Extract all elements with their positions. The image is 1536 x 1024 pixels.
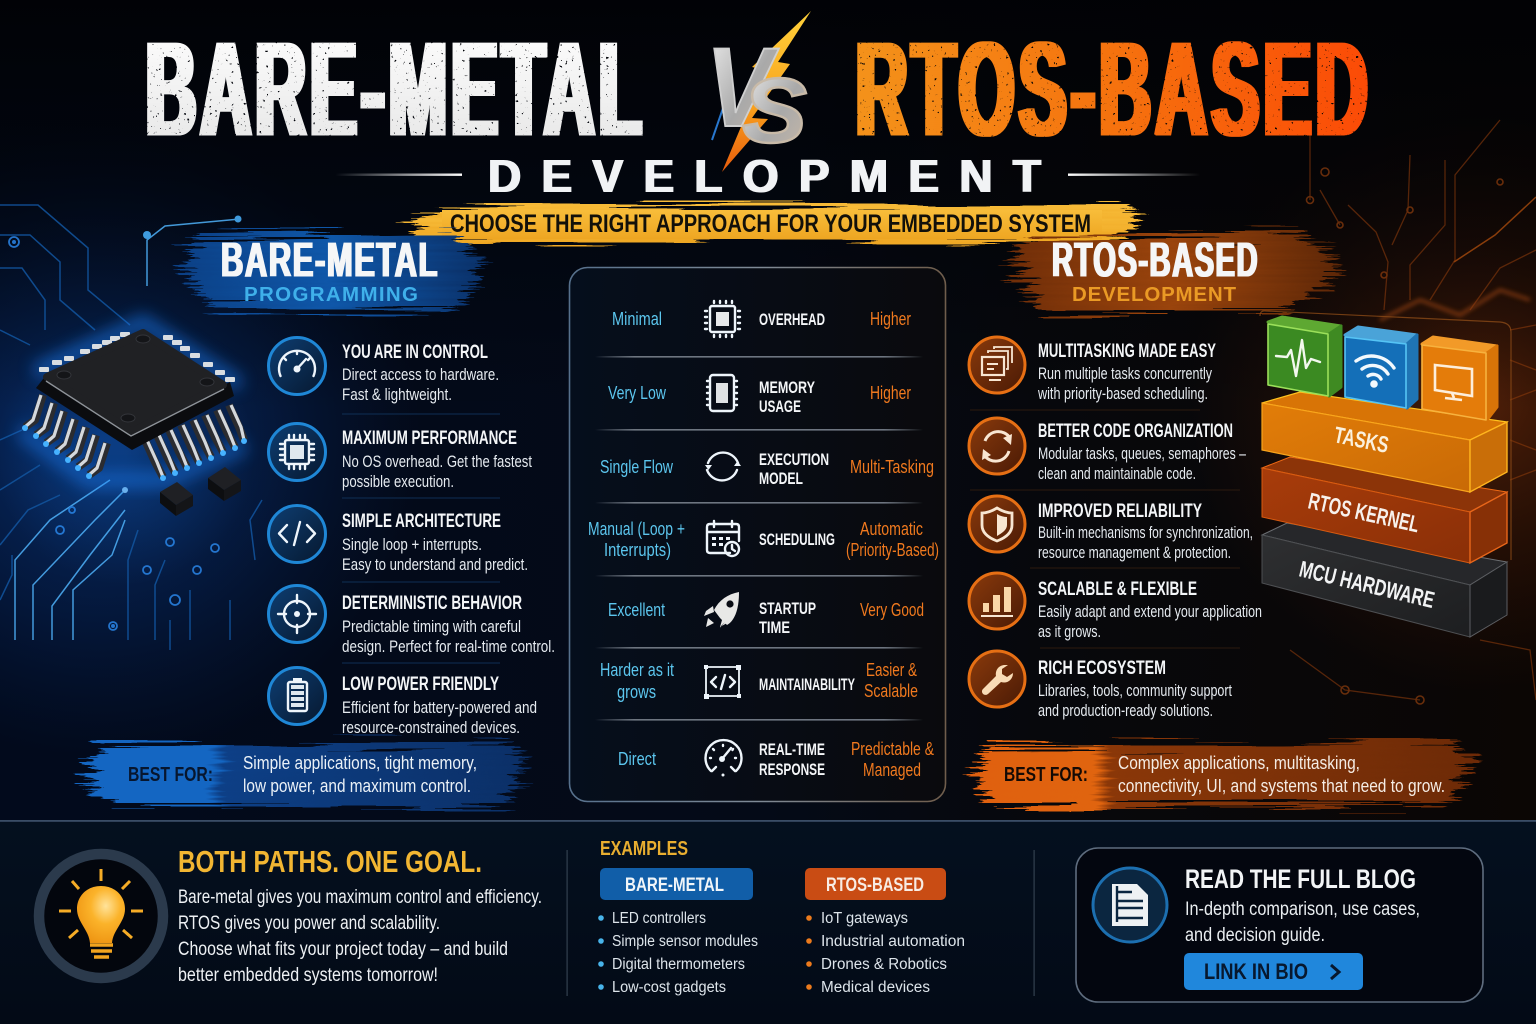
feature: scalable: SCALABLE & FLEXIBLE xyxy=(1038,579,1197,600)
icon: document xyxy=(1093,868,1167,942)
text block: both paths: BOTH PATHS. ONE GOAL. xyxy=(178,844,482,879)
heading: rtos-based development: DEVELOPMENT xyxy=(1072,283,1236,306)
call to action card xyxy=(1076,848,1483,1002)
feature: reliability: Built-in mechanisms for synchronization, xyxy=(1038,524,1253,542)
feature: you are in control xyxy=(268,338,499,404)
callout: rtos best for: Complex applications, multitasking, xyxy=(1118,753,1360,773)
layer: tasks xyxy=(1262,392,1507,492)
row: startup time: TIME xyxy=(759,619,790,637)
rtos examples: Industrial automation xyxy=(821,933,965,950)
callout: bare-metal best for xyxy=(72,742,535,806)
feature: multitasking: MULTITASKING MADE EASY xyxy=(1038,341,1216,362)
panel: rtos features xyxy=(969,337,1262,720)
text block: both paths xyxy=(178,844,542,986)
row: maintainability xyxy=(600,660,918,702)
diagram: rtos stack xyxy=(1260,311,1511,637)
row: scheduling: (Priority-Based) xyxy=(846,540,939,560)
row: scheduling: Manual (Loop + xyxy=(588,519,685,539)
panel: comparison table xyxy=(570,268,946,802)
row: memory usage: Higher xyxy=(870,383,911,403)
heading: bare-metal programming xyxy=(172,232,490,311)
feature: reliability: resource management & protection. xyxy=(1038,544,1231,562)
row: memory usage: MEMORY xyxy=(759,379,815,397)
feature: code organization: BETTER CODE ORGANIZATION xyxy=(1038,421,1233,442)
row: memory usage: Very Low xyxy=(608,383,667,403)
row: maintainability: grows xyxy=(617,682,656,702)
tile: activity xyxy=(1268,317,1341,396)
row: real-time response: Predictable & xyxy=(851,739,934,759)
layer: mcu hardware xyxy=(1262,523,1507,637)
feature: you are in control: Direct access to hardware. xyxy=(342,366,499,384)
feature: maximum performance: possible execution. xyxy=(342,473,454,491)
rtos examples: IoT gateways xyxy=(821,910,908,927)
row: execution model: Single Flow xyxy=(600,457,674,477)
layer: tasks: TASKS xyxy=(1332,421,1391,458)
feature: deterministic behavior: Predictable timing with careful xyxy=(342,618,521,636)
heading: bare-metal programming: PROGRAMMING xyxy=(244,283,418,306)
small components xyxy=(160,482,193,516)
callout: bare-metal best for: low power, and maximum control. xyxy=(243,776,471,796)
button: link in bio xyxy=(1184,953,1363,990)
feature: deterministic behavior: design. Perfect for real-time control. xyxy=(342,638,555,656)
row: memory usage: USAGE xyxy=(759,398,801,416)
row: scheduling: Interrupts) xyxy=(604,540,671,560)
layer: mcu hardware: MCU HARDWARE xyxy=(1297,556,1437,613)
rtos examples: Drones & Robotics xyxy=(821,956,947,973)
feature: multitasking xyxy=(969,337,1216,403)
callout: rtos best for xyxy=(968,742,1480,806)
feature: simple architecture: Easy to understand and predict. xyxy=(342,556,528,574)
footer panel xyxy=(0,820,1536,1024)
row: maintainability: Scalable xyxy=(864,681,918,701)
feature: low power friendly: LOW POWER FRIENDLY xyxy=(342,674,499,695)
feature: reliability xyxy=(969,496,1253,562)
bare-metal examples: Digital thermometers xyxy=(612,956,745,973)
row: maintainability: Harder as it xyxy=(600,660,674,680)
heading: bare-metal programming: BARE-METAL xyxy=(221,234,439,288)
feature: scalable: as it grows. xyxy=(1038,623,1101,641)
banner: tagline xyxy=(405,205,1146,242)
feature: simple architecture xyxy=(268,506,528,574)
text block: both paths: RTOS gives you power and scalability. xyxy=(178,913,440,934)
feature: multitasking: with priority-based scheduling. xyxy=(1037,385,1208,403)
call to action card: READ THE FULL BLOG xyxy=(1185,864,1416,894)
row: scheduling: SCHEDULING xyxy=(759,531,835,549)
row: real-time response xyxy=(618,739,934,780)
feature: low power friendly xyxy=(268,668,537,737)
row: startup time: Very Good xyxy=(860,600,924,620)
row: maintainability: MAINTAINABILITY xyxy=(759,676,855,694)
row: scheduling: Automatic xyxy=(860,519,923,539)
tile: wifi xyxy=(1345,327,1417,408)
call to action card: and decision guide. xyxy=(1185,925,1325,946)
row: execution model: MODEL xyxy=(759,470,803,488)
circuit traces: left xyxy=(0,205,262,650)
row: overhead: OVERHEAD xyxy=(759,311,825,329)
examples xyxy=(598,838,965,996)
callout: rtos best for: connectivity, UI, and systems that need to grow. xyxy=(1118,776,1445,796)
heading: rtos-based development: RTOS-BASED xyxy=(1052,234,1259,288)
row: real-time response: Managed xyxy=(863,760,921,780)
row: overhead xyxy=(612,301,911,337)
feature: maximum performance: MAXIMUM PERFORMANCE xyxy=(342,428,517,449)
feature: you are in control: Fast & lightweight. xyxy=(342,386,452,404)
bare-metal examples: Simple sensor modules xyxy=(612,933,758,950)
icon: light bulb xyxy=(39,854,163,978)
row: scheduling xyxy=(588,519,939,560)
feature: deterministic behavior: DETERMINISTIC BEHAVIOR xyxy=(342,593,522,614)
icon: lightning bolt xyxy=(712,11,811,172)
heading: rtos-based development xyxy=(1000,232,1346,311)
VS lettering: V xyxy=(706,25,779,150)
layer: rtos kernel: RTOS KERNEL xyxy=(1306,487,1422,537)
button: link in bio: LINK IN BIO xyxy=(1204,959,1308,984)
feature: low power friendly: Efficient for battery-powered and xyxy=(342,699,537,717)
circuit traces: right xyxy=(1290,120,1536,704)
feature: ecosystem: and production-ready solutions. xyxy=(1038,702,1213,720)
row: execution model xyxy=(600,451,934,488)
callout: rtos best for: BEST FOR: xyxy=(1004,764,1088,786)
call to action card: In-depth comparison, use cases, xyxy=(1185,899,1420,920)
subtitle: DEVELOPMENT: DEVELOPMENT xyxy=(488,150,1041,202)
text block: both paths: Choose what fits your project today – and build xyxy=(178,939,508,960)
feature: code organization: Modular tasks, queues, semaphores – xyxy=(1038,445,1247,463)
VS lettering xyxy=(706,25,807,162)
row: startup time: Excellent xyxy=(608,600,665,620)
chip top pads xyxy=(39,332,235,382)
row: execution model: Multi-Tasking xyxy=(850,457,934,477)
feature: code organization xyxy=(969,418,1247,483)
examples: EXAMPLES xyxy=(600,838,688,860)
feature: maximum performance xyxy=(268,424,532,491)
bare-metal examples: Low-cost gadgets xyxy=(612,979,726,996)
feature: low power friendly: resource-constrained devices. xyxy=(342,719,520,737)
row: memory usage xyxy=(608,375,911,416)
feature: multitasking: Run multiple tasks concurrently xyxy=(1038,365,1213,383)
banner: tagline: CHOOSE THE RIGHT APPROACH FOR YOUR EMBEDDED SYSTEM xyxy=(450,210,1091,238)
row: overhead: Minimal xyxy=(612,309,662,329)
bare-metal examples xyxy=(598,868,758,996)
feature: you are in control: YOU ARE IN CONTROL xyxy=(342,342,488,363)
panel: bare-metal features xyxy=(268,338,555,737)
feature: scalable: Easily adapt and extend your application xyxy=(1038,603,1262,621)
title word: BARE-METAL: BARE-METAL xyxy=(146,14,646,164)
row: real-time response: RESPONSE xyxy=(759,761,825,779)
row: startup time xyxy=(608,592,924,637)
feature: code organization: clean and maintainable code. xyxy=(1038,465,1196,483)
row: execution model: EXECUTION xyxy=(759,451,829,469)
bare-metal examples: BARE-METAL xyxy=(625,875,724,896)
callout: bare-metal best for: BEST FOR: xyxy=(128,764,213,786)
row: maintainability: Easier & xyxy=(866,660,917,680)
feature: simple architecture: SIMPLE ARCHITECTURE xyxy=(342,511,501,532)
layer: rtos kernel xyxy=(1262,457,1507,563)
feature: ecosystem xyxy=(969,651,1232,720)
feature: ecosystem: RICH ECOSYSTEM xyxy=(1038,658,1166,679)
callout: bare-metal best for: Simple applications, tight memory, xyxy=(243,753,477,773)
row: real-time response: REAL-TIME xyxy=(759,741,825,759)
feature: deterministic behavior xyxy=(268,586,555,656)
rtos examples: Medical devices xyxy=(821,979,930,996)
chip leads xyxy=(25,395,244,477)
feature: reliability: IMPROVED RELIABILITY xyxy=(1038,501,1202,522)
title xyxy=(146,11,1372,172)
text block: both paths: Bare-metal gives you maximum control and efficiency. xyxy=(178,887,542,908)
chip body xyxy=(36,374,234,450)
rtos examples xyxy=(805,868,965,996)
row: startup time: STARTUP xyxy=(759,600,816,618)
tile: display xyxy=(1422,337,1497,420)
feature: scalable xyxy=(969,573,1262,641)
feature: ecosystem: Libraries, tools, community support xyxy=(1038,682,1232,700)
illustration: microcontroller chip xyxy=(20,322,247,516)
rtos examples: RTOS-BASED xyxy=(826,875,924,896)
bare-metal examples: LED controllers xyxy=(612,910,706,927)
row: overhead: Higher xyxy=(870,309,911,329)
feature: simple architecture: Single loop + interrupts. xyxy=(342,536,482,554)
VS lettering: S xyxy=(742,60,807,162)
feature: maximum performance: No OS overhead. Get the fastest xyxy=(342,453,532,471)
text block: both paths: better embedded systems tomorrow! xyxy=(178,965,438,986)
row: real-time response: Direct xyxy=(618,749,656,769)
